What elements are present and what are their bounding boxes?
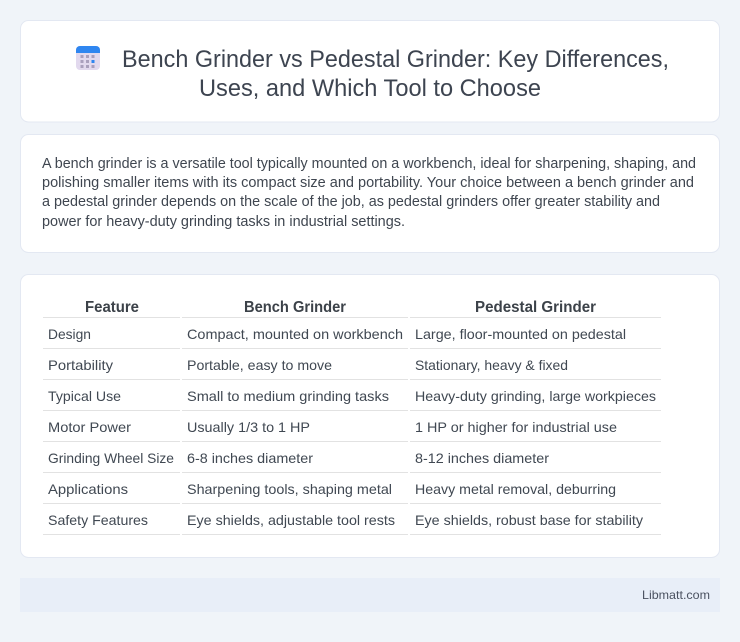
title <box>122 46 669 102</box>
table header row <box>85 299 596 316</box>
table row: grinding wheel size <box>48 450 549 466</box>
table row: typical use: Small to medium grinding tasks <box>187 388 389 404</box>
table row: portability: Stationary, heavy & fixed <box>415 357 568 373</box>
table header row: Pedestal Grinder <box>475 299 596 316</box>
table row: safety features: Safety Features <box>48 512 148 528</box>
table row: portability: Portable, easy to move <box>187 357 332 373</box>
table row: portability: Portability <box>48 357 113 373</box>
text block: introduction paragraph: power for heavy-duty grinding tasks in industrial settings. <box>42 214 405 230</box>
table row: applications: Heavy metal removal, deburring <box>415 481 616 497</box>
table row: safety features <box>48 512 643 528</box>
table row: motor power: 1 HP or higher for industrial use <box>415 419 617 435</box>
table row: design: Large, floor-mounted on pedestal <box>415 326 626 342</box>
table row: applications <box>48 481 616 497</box>
title: Uses, and Which Tool to Choose <box>199 75 541 102</box>
table row: motor power: Usually 1/3 to 1 HP <box>187 419 310 435</box>
table row: design: Design <box>48 326 91 342</box>
text block: introduction paragraph: polishing smaller items with its compact size and portability. Your choice between a bench grinder and <box>42 175 694 191</box>
table row: safety features: Eye shields, adjustable tool rests <box>187 512 395 528</box>
table row: design <box>48 326 626 342</box>
text block: introduction paragraph: a pedestal grinder depends on the scale of the job, as pedestal grinders offer greater stability and <box>42 194 660 210</box>
panel: title header <box>20 20 720 122</box>
icon: calendar <box>76 46 100 70</box>
table row: design: Compact, mounted on workbench <box>187 326 403 342</box>
table row: motor power <box>48 419 617 435</box>
table row: typical use: Heavy-duty grinding, large workpieces <box>415 388 656 404</box>
table header row: Feature <box>85 299 139 316</box>
table row: grinding wheel size: Grinding Wheel Size <box>48 450 174 466</box>
table row: safety features: Eye shields, robust base for stability <box>415 512 643 528</box>
table row: grinding wheel size: 6-8 inches diameter <box>187 450 313 466</box>
table row: typical use: Typical Use <box>48 388 121 404</box>
table row: motor power: Motor Power <box>48 419 131 435</box>
title: Bench Grinder vs Pedestal Grinder: Key Differences, <box>122 46 669 73</box>
table row: applications: Sharpening tools, shaping metal <box>187 481 392 497</box>
footer source label: Libmatt.com <box>642 588 710 602</box>
panel: comparison table <box>20 274 720 558</box>
text block: introduction paragraph: A bench grinder is a versatile tool typically mounted on a workbench, ideal for sharpening, shaping, and <box>42 156 696 172</box>
panel: introduction <box>20 134 720 252</box>
table row: applications: Applications <box>48 481 128 497</box>
table header row: Bench Grinder <box>244 299 346 316</box>
table row: grinding wheel size: 8-12 inches diameter <box>415 450 549 466</box>
text block: introduction paragraph <box>42 156 696 230</box>
table row: typical use <box>48 388 656 404</box>
footer <box>20 578 720 612</box>
table row: portability <box>48 357 568 373</box>
